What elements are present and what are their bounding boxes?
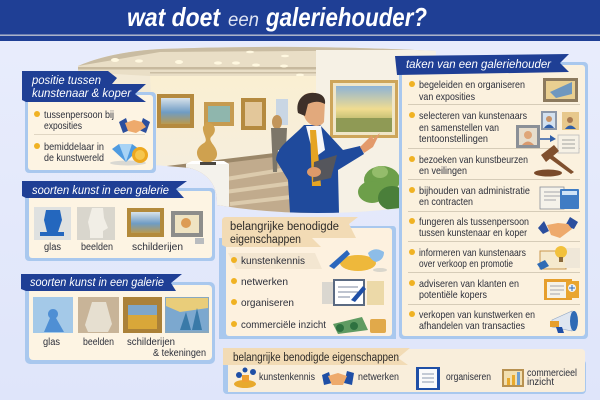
bullet text 2 [34, 141, 104, 164]
banner: positie tussen [31, 75, 101, 87]
panel: soorten kunst 2 [21, 274, 215, 364]
task 2: en samenstellen van [419, 122, 499, 134]
banner [21, 274, 182, 291]
task 6: informeren van kunstenaars [419, 247, 526, 259]
icon: megaphone [550, 311, 578, 333]
item: schilderijen [127, 208, 204, 253]
task 1: begeleiden en organiseren [419, 79, 525, 91]
icon: gavel [534, 145, 574, 176]
ceiling [78, 46, 434, 76]
woman figure [271, 115, 287, 172]
panel: taken van een galeriehouder [395, 54, 588, 339]
item: kunstenkennis [234, 368, 315, 388]
task 6 [409, 247, 526, 270]
item: commercieel inzicht: commercieel [527, 368, 577, 379]
right wall [316, 50, 436, 212]
painting 2 [204, 102, 234, 126]
title: galeriehouder: galeriehouder? [265, 2, 427, 32]
item: commerciele inzicht: commerciële inzicht [241, 319, 326, 331]
task 8: afhandelen van transacties [419, 320, 525, 332]
icon: palette and brushes [329, 249, 387, 272]
item: organiseren: organiseren [446, 372, 491, 383]
item: kunstenkennis: kunstenkennis [241, 255, 305, 267]
pedestal and sculpture [186, 122, 229, 214]
icon: artists and arrow [516, 111, 579, 153]
task 8: verkopen van kunstwerken en [419, 309, 535, 321]
banner: kunstenaar & koper [32, 88, 132, 100]
icon: handshake [119, 118, 150, 133]
item: netwerken [322, 371, 399, 385]
item: glas: glas [44, 242, 61, 253]
header band [0, 0, 600, 41]
banner [22, 181, 187, 198]
plant [358, 166, 399, 210]
item: organiseren [416, 367, 491, 390]
task 5: fungeren als tussenpersoon [419, 216, 529, 228]
painting 1 [157, 94, 194, 128]
task 7 [409, 278, 519, 301]
task 1: van exposities [419, 91, 475, 103]
item: commercieel inzicht [502, 368, 577, 388]
item: tekening: & tekeningen [153, 348, 206, 359]
icon: lightbulb and document [537, 246, 580, 270]
task 4 [409, 185, 530, 208]
task 2: selecteren van kunstenaars [419, 110, 527, 122]
gallery scene illustration [78, 46, 436, 213]
icon: painting [543, 78, 578, 102]
bullet text 2: de kunstwereld [44, 152, 104, 164]
item: glas [33, 297, 73, 348]
painting 3 [241, 98, 266, 130]
banner [223, 348, 410, 365]
icon: document with plus [544, 279, 579, 300]
item: glas: glas [43, 337, 60, 348]
painting 4 [276, 99, 288, 125]
task 4: bijhouden van administratie [419, 185, 530, 197]
bullet text 2: bemiddelaar in [44, 141, 104, 153]
banner: soorten kunst in een galerie [32, 185, 169, 197]
task 6: over verkoop en promotie [419, 258, 513, 270]
title: wat doet [127, 2, 221, 32]
big painting [330, 80, 398, 138]
back wall [152, 76, 316, 84]
item: kunstenkennis [228, 253, 322, 269]
icon: clipboard and calculator [540, 187, 579, 209]
panel: soorten kunst 1 [22, 181, 215, 261]
task 8 [409, 309, 535, 332]
item: netwerken: netwerken [358, 372, 399, 383]
item: beelden: beelden [83, 337, 114, 348]
item: schilderij [123, 297, 175, 348]
task 5: tussen kunstenaar en koper [419, 227, 527, 239]
item: kunstenkennis: kunstenkennis [259, 372, 315, 383]
task 3 [409, 154, 528, 177]
task 3: en veilingen [419, 165, 467, 177]
task 2: tentoonstellingen [419, 133, 488, 145]
item: organiseren: organiseren [241, 297, 294, 309]
panel: positie tussen kunstenaar en koper [22, 71, 156, 173]
task 5 [409, 216, 529, 239]
panel: belangrijke benodigde eigenschappen [219, 217, 396, 339]
banner [395, 54, 569, 75]
banner [22, 71, 146, 102]
banner: soorten kunst in een galerie [30, 277, 164, 289]
bullet text 1: tussenpersoon bij [44, 109, 114, 121]
item: netwerken: netwerken [241, 276, 288, 288]
floor [186, 157, 313, 213]
icon: handshake [538, 217, 578, 238]
task 4: en contracten [419, 196, 473, 208]
item: glas [34, 207, 71, 253]
title: een: een [228, 10, 259, 31]
item: beelden: beelden [81, 242, 113, 253]
icon: money and coin [333, 317, 386, 334]
bullet text 1: exposities [44, 120, 82, 132]
man [276, 93, 380, 213]
task 1 [409, 79, 525, 103]
banner: belangrijke benodigde [230, 221, 339, 233]
banner [222, 217, 358, 247]
icon: diamond and coin [110, 144, 148, 166]
item: tekening [153, 297, 209, 359]
bullet text 1 [34, 109, 114, 132]
item: schilderijen: schilderijen [132, 242, 183, 253]
task 7: adviseren van klanten en [419, 278, 519, 290]
task 7: potentiële kopers [419, 289, 487, 301]
item: commercieel inzicht: inzicht [527, 377, 554, 388]
icon: clipboard [322, 279, 384, 306]
item: beelden [78, 297, 119, 348]
banner: taken van een galeriehouder [406, 59, 552, 71]
task 2 [409, 110, 527, 145]
task 3: bezoeken van kunstbeurzen [419, 154, 528, 166]
banner: belangrijke benodigde eigenschappen [233, 352, 399, 364]
item: schilderij: schilderijen [127, 337, 175, 348]
panel: belangrijke benodigde eigenschappen breed [223, 348, 586, 394]
banner: eigenschappen [230, 234, 301, 246]
item: beelden [77, 207, 115, 253]
